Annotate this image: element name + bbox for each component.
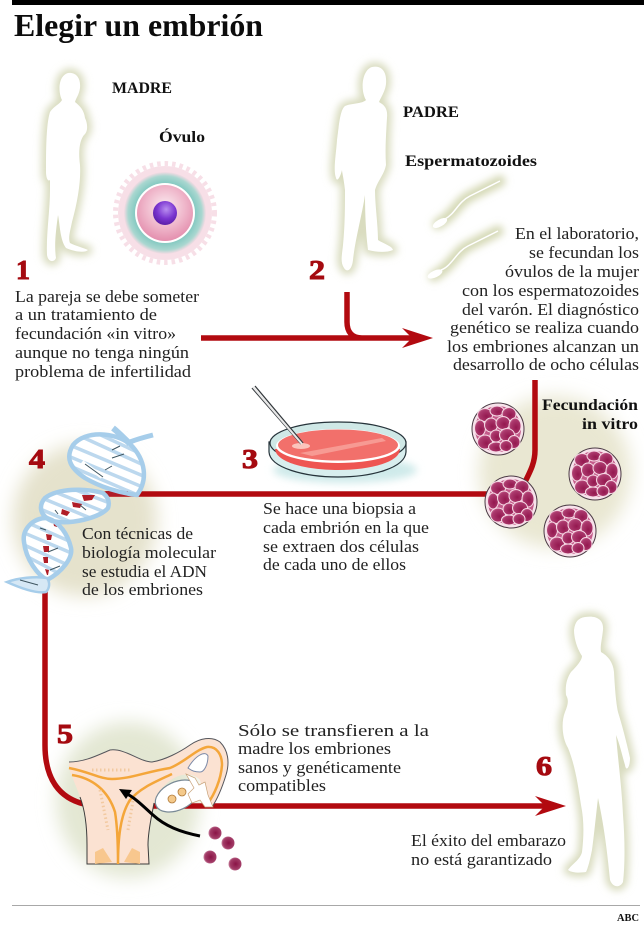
text: step 3: Se hace una biopsia a (263, 499, 416, 518)
text: laboratory: del varón. El diagnóstico (462, 300, 639, 319)
panel: uterus background blob (56, 722, 200, 878)
text: step 1: aunque no tenga ningún (15, 343, 190, 362)
arrow: uterus to pregnancy (150, 796, 566, 816)
text: laboratory: con los espermatozoides (462, 281, 639, 300)
label: madre: MADRE (112, 80, 172, 97)
icon: sperm cells (426, 181, 500, 281)
text: step 1: a un tratamiento de (15, 305, 157, 324)
label: fecundacion in vitro: in vitro (582, 416, 638, 433)
arrow: embryo transfer (119, 789, 200, 836)
panel: father silhouette (335, 67, 393, 270)
top rule (12, 0, 644, 5)
text: step 5: compatibles (238, 776, 326, 795)
text: step 1 (15, 287, 199, 381)
number 4: 4 (29, 444, 45, 474)
text: step 4: se estudia el ADN (82, 562, 207, 581)
text: step 1: La pareja se debe someter (15, 287, 199, 306)
panel: mother silhouette (46, 73, 88, 261)
text: step 3: cada embrión en la que (263, 518, 429, 537)
text: step 5: madre los embriones (238, 739, 391, 758)
icon: uterus (69, 738, 228, 864)
text: laboratory: óvulos de la mujer (505, 262, 639, 281)
text: step 3: se extraen dos células (263, 537, 419, 556)
title: Elegir un embrión (14, 7, 263, 43)
text: step 5 (238, 721, 430, 795)
text: step 5: sanos y genéticamente (238, 758, 401, 777)
number 3: 3 (242, 444, 258, 474)
text: step 6: El éxito del embarazo (411, 831, 566, 850)
panel: pregnant woman silhouette (563, 617, 630, 886)
icon: petri dish with needle (252, 386, 417, 483)
number 5: 5 (57, 719, 73, 749)
text: laboratory: En el laboratorio, (515, 224, 639, 243)
text: laboratory: genético se realiza cuando (450, 318, 639, 337)
label: fecundacion in vitro (542, 397, 638, 433)
connector: red path through embryos to DNA (100, 380, 535, 494)
text: step 4 (82, 524, 216, 599)
text: step 4: biología molecular (82, 543, 216, 562)
icon: ovum (116, 164, 214, 262)
text: step 5: Sólo se transfieren a la (238, 721, 430, 740)
label: fecundacion in vitro: Fecundación (542, 397, 638, 414)
credit: ABC (617, 913, 639, 924)
text: laboratory (447, 224, 640, 374)
label: ovulo: Óvulo (159, 129, 205, 146)
number 6: 6 (536, 751, 552, 781)
text: step 4: Con técnicas de (82, 524, 193, 543)
icon: embryos (472, 403, 621, 557)
text: step 1: problema de infertilidad (15, 362, 192, 381)
text: step 6: no está garantizado (411, 850, 552, 869)
panel: embryo background blob (479, 396, 631, 548)
icon: DNA helix (7, 428, 153, 592)
number 1: 1 (16, 255, 30, 285)
text: laboratory: los embriones alcanzan un (447, 337, 640, 356)
number 2: 2 (309, 255, 325, 285)
connector: left vertical (45, 585, 84, 804)
panel: DNA background blob (13, 444, 157, 596)
icon: healthy embryos (204, 826, 242, 870)
text: step 4: de los embriones (82, 580, 203, 599)
text: step 6 (411, 831, 566, 869)
text: step 1: fecundación «in vitro» (15, 324, 176, 343)
arrow: step 1 and 2 to laboratory (201, 292, 433, 348)
label: espermatozoides: Espermatozoides (405, 153, 537, 170)
text: laboratory: se fecundan los (529, 243, 639, 262)
label: padre: PADRE (403, 104, 459, 121)
text: step 3 (263, 499, 429, 574)
text: laboratory: desarrollo de ocho células (453, 355, 639, 374)
text: step 3: de cada uno de ellos (263, 555, 406, 574)
